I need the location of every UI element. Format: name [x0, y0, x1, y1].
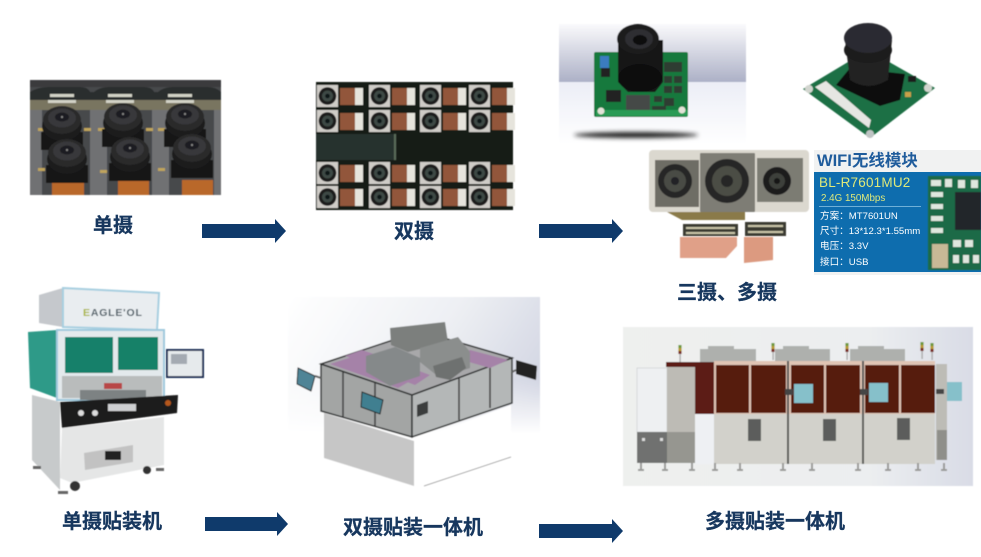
photo: single camera modules on PCB — [30, 80, 221, 195]
photo: camera board with large lens — [803, 23, 935, 138]
module circuit board — [928, 176, 981, 270]
arrow: single to dual machine — [205, 512, 288, 536]
spec text: 尺寸：13*12.3*1.55mm — [820, 225, 920, 237]
photo: triple camera module — [649, 150, 809, 263]
spec text: 接口：USB — [820, 256, 869, 268]
heading: WIFI module: WIFI无线模块 — [817, 151, 918, 170]
spec text — [819, 175, 921, 268]
panel background: blue spec area — [814, 172, 981, 272]
label: 单摄贴装机: 单摄贴装机 — [62, 510, 162, 533]
spec text: 电压：3.3V — [820, 240, 869, 252]
spec text: BL-R7601MU2 — [819, 175, 910, 190]
machine: single camera mounting machine — [28, 288, 204, 494]
label: 单摄: 单摄 — [93, 214, 133, 237]
arrow: dual to multi machine — [539, 519, 623, 543]
spec text: 方案：MT7601UN — [820, 210, 898, 222]
photo: camera board on gradient backdrop — [559, 24, 746, 145]
spec text: 2.4G 150Mbps — [821, 193, 885, 204]
arrow: single to dual camera — [202, 219, 286, 243]
machine: single camera mounting machine: EAGLE'OL — [83, 307, 143, 319]
label: 双摄: 双摄 — [394, 220, 434, 243]
panel: WIFI module card — [814, 150, 981, 275]
label: 双摄贴装一体机: 双摄贴装一体机 — [343, 516, 483, 539]
arrow: dual to multi camera — [539, 219, 623, 243]
photo: dual camera modules — [316, 82, 515, 210]
label: 三摄、多摄: 三摄、多摄 — [677, 281, 777, 304]
machine render: multi camera all-in-one — [623, 327, 973, 486]
machine render: dual camera all-in-one — [288, 297, 540, 487]
label: 多摄贴装一体机: 多摄贴装一体机 — [705, 510, 845, 533]
